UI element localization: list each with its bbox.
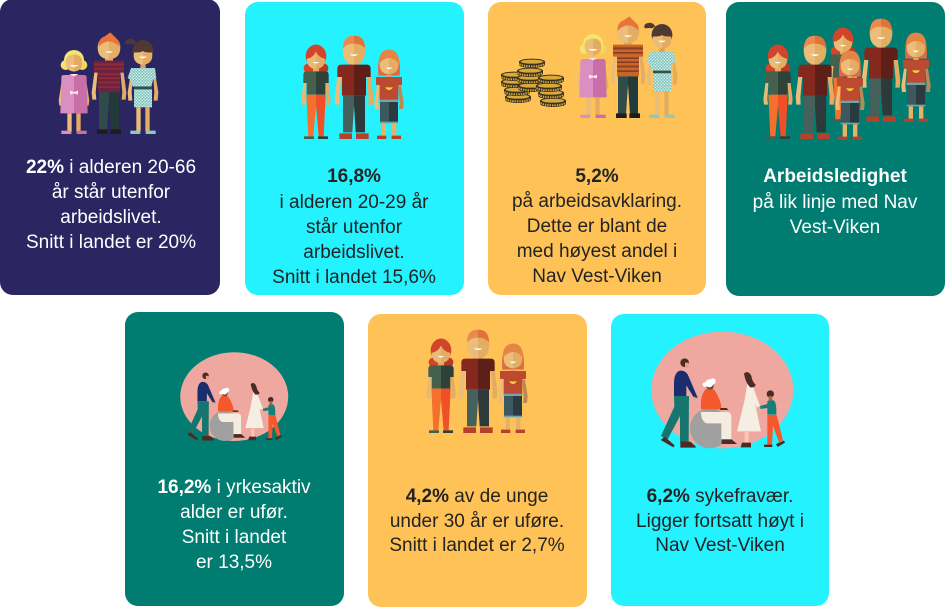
text: 6,2%: Nav Vest-Viken: [655, 535, 785, 556]
text: 16,2%: er 13,5%: [196, 552, 272, 573]
text: unemployment: Arbeidsledighet: [763, 166, 907, 187]
text: 16,8%: arbeidslivet.: [303, 242, 405, 263]
text: 4,2%: Snitt i landet er 2,7%: [389, 535, 565, 556]
text: 16,2%: alder er ufør.: [180, 502, 288, 523]
text: unemployment: Vest-Viken: [790, 217, 880, 238]
icon: coin stacks: [501, 59, 566, 107]
text: 16,2%: 16,2% i yrkesaktiv: [157, 477, 311, 498]
icon: care scene: [651, 332, 793, 448]
icon: family of three: [59, 32, 158, 134]
text: 16,8%: står utenfor: [306, 217, 403, 238]
text: 22%: Snitt i landet er 20%: [26, 232, 196, 253]
text: 22%: [26, 157, 196, 253]
panel: unemployment: [726, 2, 945, 296]
text: 6,2%: Ligger fortsatt høyt i: [636, 511, 804, 532]
text: 4,2%: 4,2% av de unge: [406, 486, 548, 507]
icon: red-haired family: [426, 330, 528, 433]
text: 4,2%: under 30 år er uføre.: [390, 511, 564, 532]
text: 5,2%: på arbeidsavklaring.: [512, 191, 682, 212]
text: 5,2%: Nav Vest-Viken: [532, 266, 662, 287]
text: 5,2%: 5,2%: [575, 166, 619, 187]
panel: 16,2% disabled: [125, 312, 344, 606]
text: unemployment: på lik linje med Nav: [753, 192, 918, 213]
text: 16,8%: 16,8%: [327, 166, 381, 187]
text: 16,2%: Snitt i landet: [182, 527, 287, 548]
icon: red-haired family: [301, 36, 404, 139]
text: 16,8%: i alderen 20-29 år: [280, 192, 429, 213]
text: 4,2%: [389, 486, 565, 556]
text: 22%: arbeidslivet.: [60, 207, 162, 228]
panel: 6,2% sick leave: [611, 314, 829, 606]
text: 22%: år står utenfor: [52, 182, 171, 203]
text: 5,2%: [512, 166, 682, 287]
panel: 16,8% aged 20-29: [245, 2, 464, 295]
text: 16,8%: [272, 166, 436, 288]
text: 6,2%: 6,2% sykefravær.: [647, 486, 793, 507]
text: 5,2%: med høyest andel i: [517, 241, 677, 262]
text: 22%: 22% i alderen 20-66: [26, 157, 196, 178]
panel: 5,2% work assessment: [488, 2, 706, 295]
text: 6,2%: [636, 486, 804, 556]
text: unemployment: [753, 166, 918, 238]
icon: family of three: [578, 16, 677, 118]
icon: care scene: [180, 352, 288, 441]
text: 16,8%: Snitt i landet 15,6%: [272, 267, 436, 288]
icon: two families: [763, 19, 931, 140]
text: 16,2%: [157, 477, 311, 573]
panel: 4,2% young disabled: [368, 314, 587, 607]
text: 5,2%: Dette er blant de: [527, 216, 667, 237]
panel: 22% outside working life: [0, 0, 220, 295]
